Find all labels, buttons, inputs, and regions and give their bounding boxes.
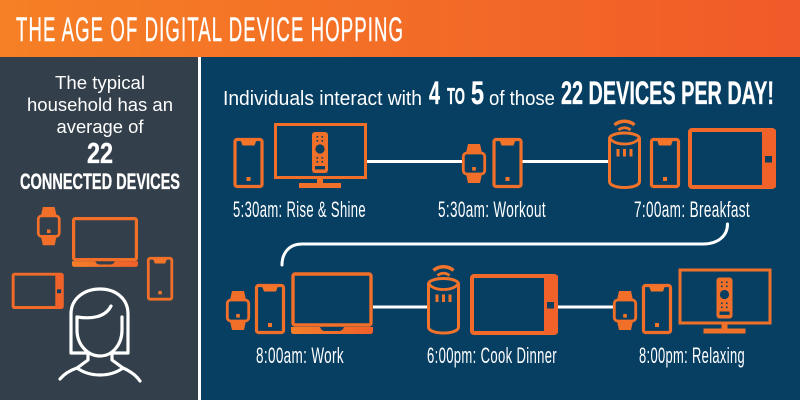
icon: watch: [614, 291, 636, 330]
step: workout: [438, 140, 546, 222]
icon: smart speaker: [428, 267, 458, 333]
step: breakfast: [610, 121, 776, 222]
title: THE AGE OF DIGITAL DEVICE HOPPING: [16, 11, 404, 49]
icon: phone: [652, 140, 678, 186]
label: 5:30am: Rise & Shine: [233, 197, 366, 222]
icon: laptop: [72, 219, 138, 267]
label: 6:00pm: Cook Dinner: [427, 343, 557, 368]
label: 8:00am: Work: [256, 343, 344, 368]
step: rise and shine: [233, 124, 366, 222]
icon: watch: [463, 144, 485, 183]
icon: smart speaker: [610, 121, 640, 188]
intro text: average of: [56, 117, 145, 137]
headline: devices per day: Individuals interact with: [223, 88, 422, 110]
step: relaxing: [614, 270, 770, 368]
icon: laptop: [291, 274, 373, 334]
icon: tablet: [13, 274, 63, 308]
intro text: [27, 73, 173, 137]
intro text: household has an: [27, 95, 173, 115]
icon: phone: [644, 286, 670, 332]
panel: household devices: [0, 57, 198, 400]
header banner: [0, 0, 800, 57]
headline: devices per day: 4: [429, 75, 440, 111]
icon: phone: [148, 258, 172, 299]
icon: phone: [256, 286, 284, 332]
icon: watch: [38, 207, 59, 245]
headline: devices per day: [223, 75, 774, 111]
stat label: connected devices: CONNECTED DEVICES: [20, 169, 180, 194]
step: work: [227, 274, 373, 368]
label: 5:30am: Workout: [438, 197, 546, 222]
intro text: The typical: [55, 73, 145, 93]
connector lines: [282, 162, 728, 307]
icon: tablet: [690, 129, 776, 188]
icon: tv with remote: [680, 270, 770, 334]
headline: devices per day: of those: [489, 88, 555, 110]
step: cook dinner: [427, 267, 558, 368]
divider: [198, 57, 201, 400]
icon: person: [60, 289, 140, 381]
headline: devices per day: 5: [471, 75, 484, 111]
headline: devices per day: TO: [447, 83, 465, 109]
icon: tablet: [472, 275, 558, 334]
icon: phone: [494, 140, 521, 186]
background: blue main panel: [201, 57, 800, 400]
icon: watch: [227, 291, 249, 330]
icon: phone: [235, 140, 262, 186]
stat: 22: 22: [87, 138, 113, 170]
icon: tv with remote: [276, 124, 366, 188]
